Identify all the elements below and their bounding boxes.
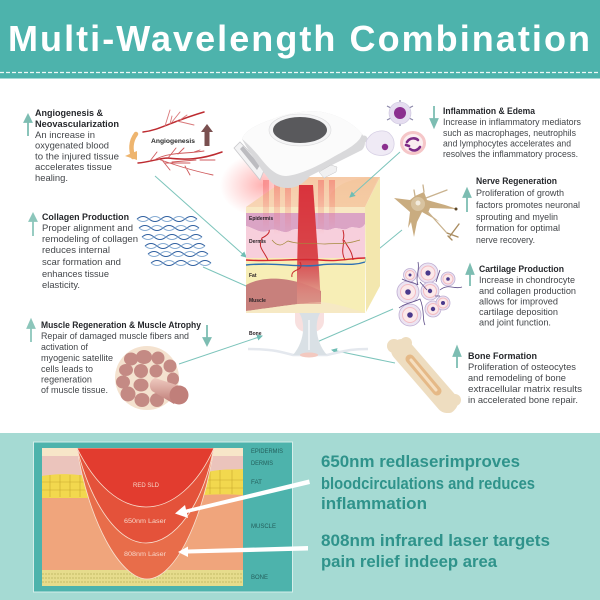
text: cartilage deposition — [479, 307, 558, 318]
block: angiogenesis — [24, 108, 222, 184]
text: allows for improved — [479, 296, 558, 308]
arrow up — [28, 320, 34, 342]
block: inflammation and edema — [366, 100, 581, 160]
layer labels: Fat — [249, 273, 257, 279]
block: muscle regeneration — [28, 320, 210, 410]
connector lines — [155, 176, 402, 364]
text — [35, 108, 119, 184]
light penetration curves — [77, 448, 214, 579]
text: 650nm description: bloodcirculations and reduces — [321, 475, 535, 493]
layer labels: Dermis — [249, 239, 266, 245]
text: Repair of damaged muscle fibers and — [41, 331, 189, 342]
text: Collagen Production — [42, 212, 129, 223]
chart labels inside curves: 808nm Laser — [124, 551, 167, 558]
text — [476, 176, 580, 246]
panel: penetration depth chart — [34, 442, 292, 592]
text — [468, 351, 582, 406]
text: 808nm description: 808nm infrared laser targets — [321, 532, 550, 550]
text: Increase in inflammatory mediators — [443, 117, 581, 128]
chart labels inside curves: 650nm Laser — [124, 518, 167, 525]
text: 808nm description: pain relief indeep area — [321, 553, 498, 571]
icon: bone — [387, 337, 461, 413]
chart labels inside curves: RED SLD — [133, 482, 159, 489]
text: nerve recovery. — [476, 235, 535, 246]
text: 650nm description: inflammation — [321, 495, 427, 513]
text: Neovascularization — [35, 119, 119, 130]
text: Proper alignment and — [42, 223, 133, 234]
text: accelerates tissue — [35, 162, 112, 173]
text — [479, 264, 576, 328]
icon label: Angiogenesis — [151, 138, 195, 145]
chart labels inside curves — [124, 482, 167, 558]
title: Multi-Wavelength Combination — [8, 18, 590, 59]
layer labels — [249, 216, 273, 337]
text: such as macrophages, neutrophils — [443, 128, 576, 139]
text: to the injured tissue — [35, 152, 119, 162]
text: elasticity. — [42, 280, 80, 291]
layer labels: Epidermis — [249, 216, 273, 222]
layer legend: EPIDERMIS — [251, 448, 284, 455]
device top face — [242, 111, 362, 176]
arrow up — [24, 115, 32, 136]
laser device — [234, 111, 368, 188]
text — [443, 106, 581, 160]
device body — [242, 111, 365, 188]
text: 808nm description — [321, 532, 550, 571]
layer legend — [251, 448, 284, 581]
text: Bone Formation — [468, 351, 537, 362]
arrow down — [204, 325, 210, 345]
text: healing. — [35, 173, 68, 184]
arrow up — [30, 214, 36, 236]
red laser beam — [297, 185, 321, 304]
device screen — [269, 114, 331, 146]
text: in accelerated bone repair. — [468, 395, 578, 406]
skin layers — [246, 207, 366, 313]
layer labels: Muscle — [249, 298, 266, 304]
text: Increase in chondrocyte — [479, 275, 575, 286]
bottom band — [0, 433, 600, 600]
text: remodeling of collagen — [42, 234, 138, 245]
text: factors promotes neuronal — [476, 200, 580, 211]
layer legend: MUSCLE — [251, 523, 277, 530]
block: cartilage production — [397, 262, 576, 328]
text: extracellular matrix results — [468, 384, 582, 395]
block: collagen production — [30, 212, 211, 291]
icon: cartilage cells — [397, 262, 462, 326]
layer legend: DERMIS — [251, 460, 274, 467]
text: Cartilage Production — [479, 264, 564, 275]
tissue layers — [42, 448, 243, 586]
arrow up — [466, 265, 474, 286]
text: myogenic satellite — [41, 353, 113, 364]
icon: collagen helices — [137, 216, 211, 266]
blood vessels and nerves — [246, 230, 365, 277]
arrow: to 808nm zone — [178, 546, 308, 557]
text: regeneration — [41, 374, 92, 386]
text: resolves the inflammatory process. — [443, 149, 578, 160]
text: and collagen production — [479, 286, 576, 297]
text: Proliferation of osteocytes — [468, 362, 576, 373]
text: of muscle tissue. — [41, 385, 108, 396]
text: and lymphocytes accelerates and — [443, 138, 571, 150]
text: Muscle Regeneration & Muscle Atrophy — [41, 320, 202, 331]
text — [42, 212, 138, 291]
text — [41, 320, 202, 396]
text: sprouting and myelin — [476, 212, 558, 223]
header banner — [0, 0, 600, 78]
layer labels: Bone — [249, 331, 262, 337]
text: Inflammation & Edema — [443, 106, 536, 117]
icon: angiogenesis vessels — [125, 110, 222, 175]
text: enhances tissue — [42, 269, 109, 280]
text: oxygenated blood — [35, 140, 109, 152]
text: formation for optimal — [476, 223, 560, 234]
text: cells leads to — [41, 364, 93, 375]
text: reduces internal — [42, 245, 110, 256]
text: activation of — [41, 342, 88, 353]
text: Angiogenesis & — [35, 108, 103, 119]
skin block side face — [365, 177, 380, 312]
layer legend: BONE — [251, 574, 269, 581]
text: Proliferation of growth — [476, 188, 564, 199]
device handle — [234, 142, 265, 180]
skin cross-section illustration — [220, 153, 380, 358]
block: bone formation — [387, 337, 582, 413]
icon: nerve cell — [394, 185, 459, 240]
text: and joint function. — [479, 318, 551, 328]
arrow up — [464, 189, 470, 212]
text: 650nm description — [321, 453, 535, 513]
text: 650nm description: 650nm redlaserimproves — [321, 453, 520, 471]
skin block top face — [246, 177, 380, 207]
arrow: to 650nm zone — [175, 480, 310, 518]
arrow up — [454, 347, 460, 368]
bone and tendon below skin — [248, 300, 368, 358]
icon: muscle bundle — [115, 346, 188, 410]
connector: inflammation to skin — [350, 152, 400, 197]
text: An increase in — [35, 130, 95, 141]
curved orange arrow — [131, 134, 136, 157]
icon: immune cells — [366, 100, 426, 155]
arrow down — [430, 106, 438, 127]
brown arrow — [201, 124, 213, 146]
block: nerve regeneration — [394, 176, 580, 246]
text: and remodeling of bone — [468, 373, 566, 384]
light rays — [263, 180, 335, 235]
text: scar formation and — [42, 257, 121, 268]
layer legend: FAT — [251, 479, 262, 486]
device button — [319, 165, 337, 178]
text: Nerve Regeneration — [476, 176, 557, 187]
